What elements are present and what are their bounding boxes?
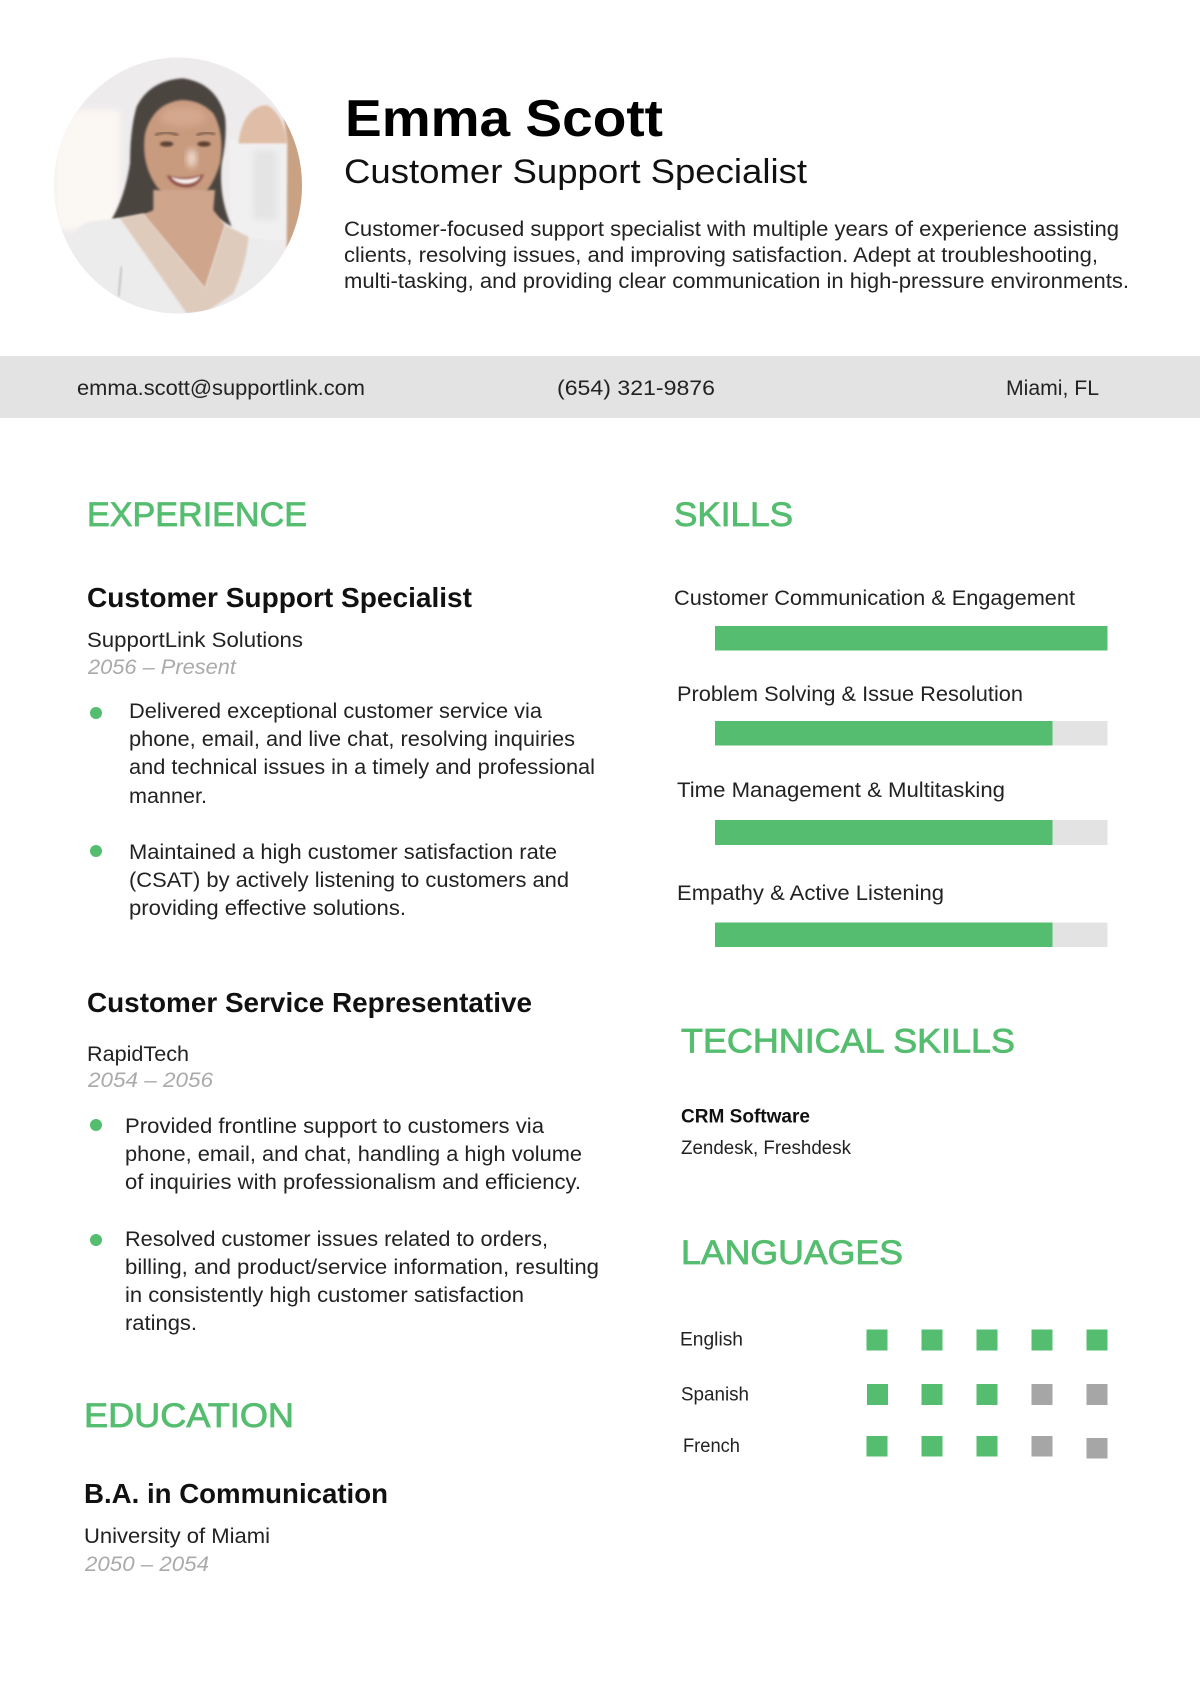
- language ratings: French: [683, 1436, 740, 1457]
- technical skills entry: Zendesk, Freshdesk: [681, 1138, 851, 1159]
- technical skills entry: CRM Software: [681, 1106, 810, 1128]
- job 2: billing, and product/service information, resulting: [125, 1256, 599, 1279]
- language ratings: English: [680, 1330, 743, 1350]
- job 1: phone, email, and live chat, resolving inquiries: [129, 728, 575, 751]
- job 2: Provided frontline support to customers via: [125, 1115, 544, 1138]
- education entry: 2050 – 2054: [84, 1553, 209, 1576]
- contact bar: (654) 321-9876: [557, 377, 715, 400]
- language ratings: [680, 1330, 1108, 1458]
- job 2: phone, email, and chat, handling a high volume: [125, 1143, 582, 1166]
- education entry: [84, 1478, 388, 1576]
- education entry: University of Miami: [84, 1525, 270, 1548]
- job 1: manner.: [129, 785, 207, 808]
- job 2: in consistently high customer satisfaction: [125, 1284, 524, 1307]
- summary: multi-tasking, and providing clear communication in high-pressure environments.: [344, 270, 1129, 293]
- job 1: Delivered exceptional customer service via: [129, 700, 542, 723]
- contact bar: Miami, FL: [1006, 377, 1099, 400]
- skill bars: Empathy & Active Listening: [677, 882, 944, 905]
- job 2: ratings.: [125, 1312, 197, 1335]
- skill bars: Time Management & Multitasking: [677, 779, 1005, 802]
- job 1: SupportLink Solutions: [87, 629, 303, 652]
- experience heading: EXPERIENCE: [87, 496, 307, 534]
- job 2: of inquiries with professionalism and efficiency.: [125, 1171, 581, 1194]
- job title: Customer Support Specialist: [344, 153, 808, 191]
- contact bar: [0, 356, 1200, 418]
- job 1: [87, 582, 595, 920]
- skill bars: [674, 587, 1108, 947]
- summary: Customer-focused support specialist with multiple years of experience assisting: [344, 218, 1119, 241]
- job 2: [87, 987, 599, 1335]
- portrait photo: [50, 50, 310, 320]
- summary: clients, resolving issues, and improving satisfaction. Adept at troubleshooting,: [344, 244, 1098, 267]
- summary: [344, 218, 1129, 293]
- technical skills entry: [681, 1106, 851, 1159]
- languages heading: LANGUAGES: [681, 1234, 903, 1272]
- job 1: Customer Support Specialist: [87, 582, 472, 613]
- education heading: EDUCATION: [84, 1397, 294, 1435]
- contact bar: emma.scott@supportlink.com: [77, 377, 365, 400]
- technical skills heading: TECHNICAL SKILLS: [681, 1022, 1015, 1060]
- job 1: providing effective solutions.: [129, 897, 406, 920]
- skills heading: SKILLS: [674, 496, 793, 534]
- job 1: and technical issues in a timely and professional: [129, 756, 595, 779]
- name heading: Emma Scott: [345, 90, 663, 148]
- job 1: Maintained a high customer satisfaction rate: [129, 841, 557, 864]
- job 2: Resolved customer issues related to orders,: [125, 1228, 548, 1251]
- skill bars: Customer Communication & Engagement: [674, 587, 1075, 610]
- job 2: 2054 – 2056: [87, 1069, 213, 1092]
- job 1: 2056 – Present: [87, 656, 237, 679]
- job 2: RapidTech: [87, 1043, 189, 1066]
- skill bars: Problem Solving & Issue Resolution: [677, 683, 1023, 706]
- language ratings: Spanish: [681, 1384, 749, 1406]
- education entry: B.A. in Communication: [84, 1478, 388, 1509]
- job 2: Customer Service Representative: [87, 987, 532, 1018]
- job 1: (CSAT) by actively listening to customers and: [129, 869, 569, 892]
